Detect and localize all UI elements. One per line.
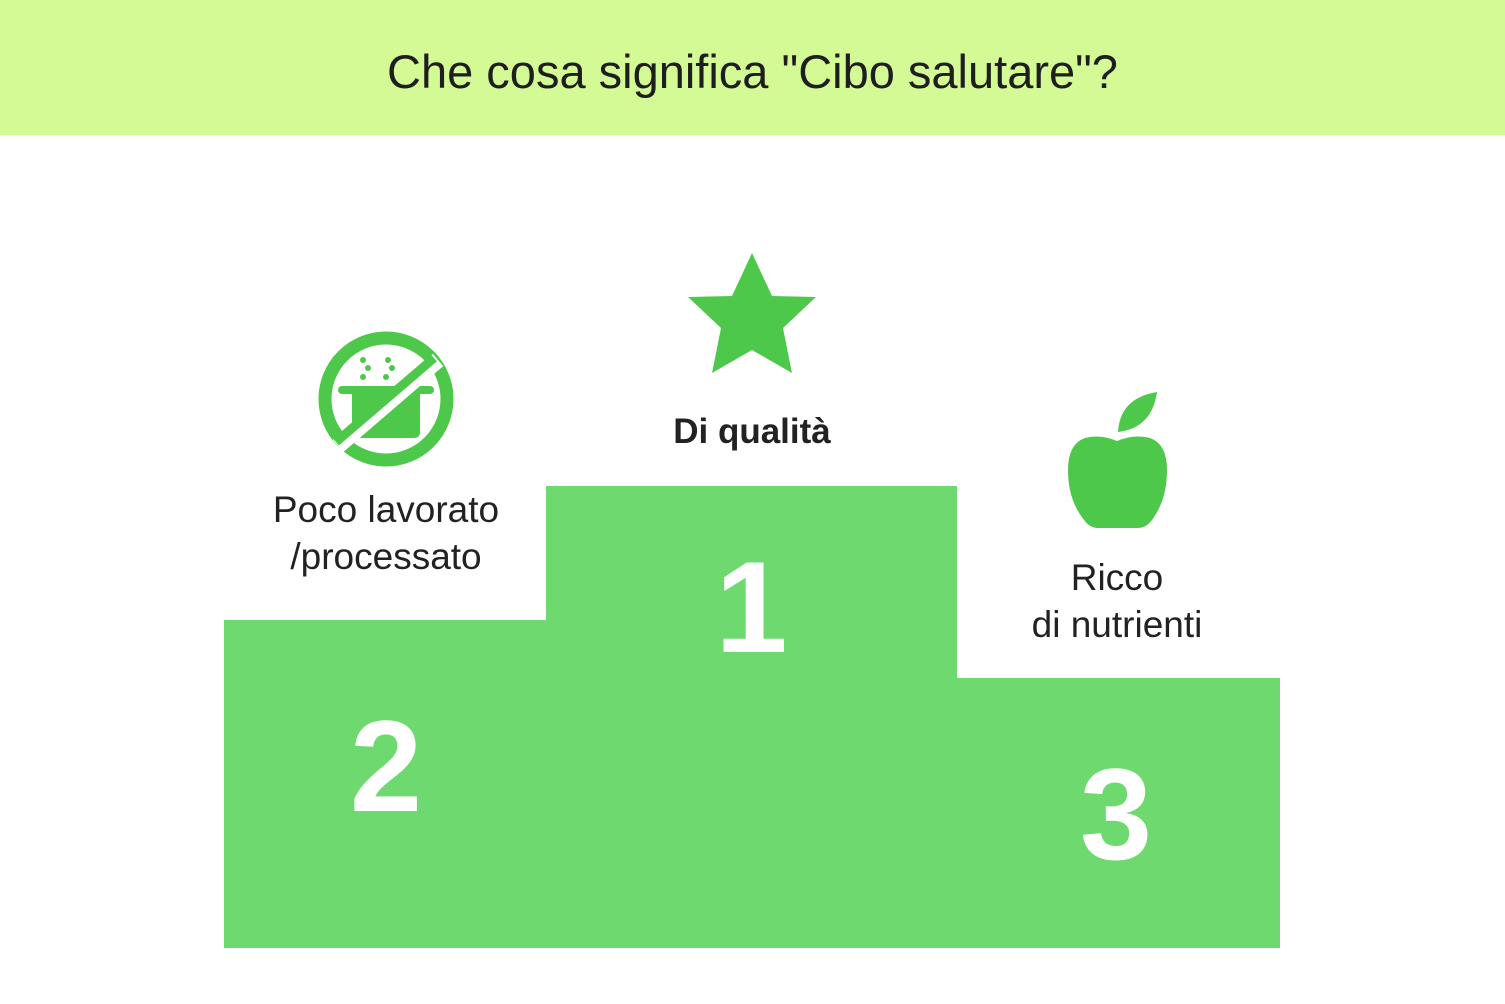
number 3: 3	[1080, 741, 1152, 887]
podium block 3	[957, 678, 1280, 948]
header band	[0, 0, 1505, 135]
number 2: 2	[350, 693, 422, 839]
podium block 2	[224, 620, 546, 948]
icon: no processed pot	[318, 332, 454, 466]
label: poco lavorato: /processato	[290, 536, 482, 577]
number 1: 1	[715, 534, 788, 680]
icon: star	[688, 253, 816, 373]
label: poco lavorato	[273, 489, 499, 577]
label: ricco di nutrienti	[1032, 557, 1202, 645]
title: Che cosa significa "Cibo salutare"?	[387, 45, 1118, 98]
icon: apple	[1068, 392, 1167, 528]
label: poco lavorato: Poco lavorato	[273, 489, 499, 530]
label: di qualita: Di qualità	[673, 412, 831, 451]
label: ricco di nutrienti: di nutrienti	[1032, 604, 1202, 645]
label: ricco di nutrienti: Ricco	[1071, 557, 1163, 598]
podium block 1	[546, 486, 957, 948]
